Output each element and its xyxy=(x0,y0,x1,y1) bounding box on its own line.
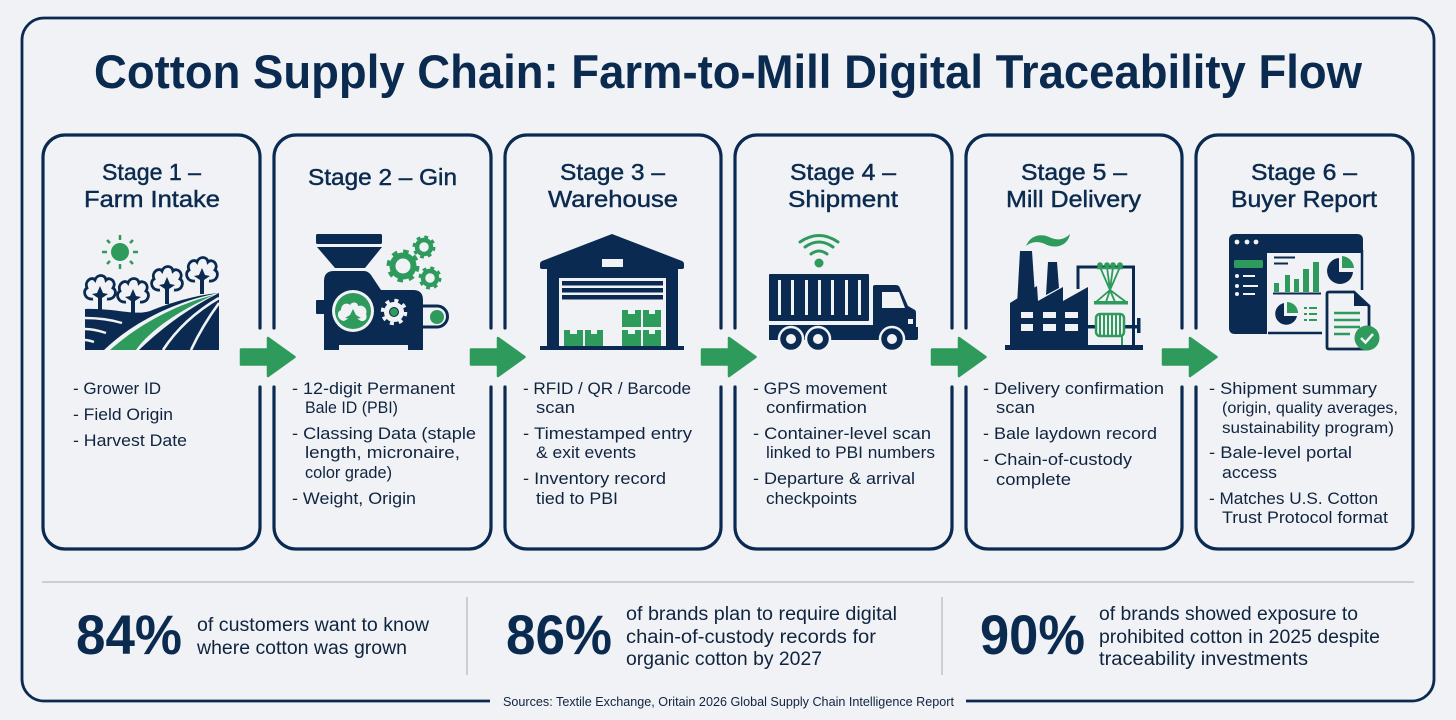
stat: 86% xyxy=(506,603,897,670)
heading: stage 3 xyxy=(548,159,678,212)
stat: 84%: of customers want to know xyxy=(197,615,429,636)
list: stage 3 details: scan xyxy=(536,398,575,417)
panel: stage 2 gin xyxy=(274,135,491,549)
list: stage 6 details: (origin, quality averages, xyxy=(1222,400,1398,417)
list: stage 4 details: linked to PBI numbers xyxy=(766,443,935,462)
list: stage 5 details: - Chain-of-custody xyxy=(983,450,1133,469)
arrow: stage 3 to 4 xyxy=(702,338,756,376)
stat: 86%: 86% xyxy=(506,603,612,666)
heading: stage 5 xyxy=(1006,159,1142,212)
stat: 84%: where cotton was grown xyxy=(196,638,407,659)
list: stage 5 details: complete xyxy=(996,470,1071,489)
list: stage 6 details: access xyxy=(1222,463,1277,482)
heading: stage 5: Mill Delivery xyxy=(1006,186,1142,212)
list: stage 3 details: - Timestamped entry xyxy=(523,424,693,443)
list: stage 6 details: - Matches U.S. Cotton xyxy=(1209,489,1378,508)
list: stage 1 details: - Grower ID xyxy=(73,379,161,398)
list: stage 3 details: - Inventory record xyxy=(523,469,666,488)
panel: stage 4 shipment xyxy=(735,135,952,549)
icon: warehouse xyxy=(540,234,684,350)
list: stage 5 details: - Bale laydown record xyxy=(983,424,1157,443)
list: stage 6 details xyxy=(1209,379,1398,527)
list: stage 1 details xyxy=(73,379,187,450)
list: stage 1 details: - Field Origin xyxy=(73,405,173,424)
heading: stage 3: Warehouse xyxy=(548,186,678,212)
list: stage 6 details: - Shipment summary xyxy=(1209,379,1378,398)
stat: 90%: prohibited cotton in 2025 despite xyxy=(1099,627,1380,648)
icon: cotton farm xyxy=(85,235,219,350)
stat: 90%: traceability investments xyxy=(1099,649,1308,670)
heading: stage 4 xyxy=(788,159,899,212)
heading: stage 4: Shipment xyxy=(788,186,899,212)
list: stage 4 details: confirmation xyxy=(766,398,867,417)
icon: cotton gin machine xyxy=(316,234,448,350)
list: stage 4 details: - Departure & arrival xyxy=(753,469,915,488)
arrow: stage 4 to 5 xyxy=(932,338,986,376)
list: stage 3 details xyxy=(523,379,693,508)
list: stage 5 details: scan xyxy=(996,398,1035,417)
heading: stage 3: Stage 3 – xyxy=(560,159,665,185)
list: stage 5 details: - Delivery confirmation xyxy=(983,379,1164,398)
panel: stage 6 buyer report xyxy=(1196,135,1413,549)
stat: 90%: 90% xyxy=(980,603,1085,666)
list: stage 3 details: - RFID / QR / Barcode xyxy=(523,379,691,398)
stat: 86%: organic cotton by 2027 xyxy=(626,649,822,670)
sources note: Sources: Textile Exchange, Oritain 2026 Global Supply Chain Intelligence Report xyxy=(503,695,955,709)
stat: 86%: of brands plan to require digital xyxy=(626,604,897,625)
list: stage 2 details: color grade) xyxy=(305,463,392,482)
arrow: stage 5 to 6 xyxy=(1163,338,1216,376)
panel: stage 5 mill delivery xyxy=(966,135,1182,549)
panel: stage 3 warehouse xyxy=(505,135,721,549)
list: stage 6 details: - Bale-level portal xyxy=(1209,443,1352,462)
icon: container truck with wifi xyxy=(769,236,918,351)
arrow: stage 2 to 3 xyxy=(471,338,524,376)
list: stage 6 details: Trust Protocol format xyxy=(1222,508,1388,527)
heading: stage 6 xyxy=(1231,159,1378,212)
heading: stage 2: Stage 2 – Gin xyxy=(308,164,457,190)
list: stage 6 details: sustainability program) xyxy=(1222,420,1394,437)
arrow: stage 1 to 2 xyxy=(241,338,294,376)
heading: stage 6: Buyer Report xyxy=(1231,186,1378,212)
icon: report dashboard xyxy=(1229,234,1380,350)
heading: stage 4: Stage 4 – xyxy=(790,159,896,185)
list: stage 3 details: tied to PBI xyxy=(536,489,618,508)
heading: stage 1: Stage 1 – xyxy=(102,159,201,185)
stat: 84%: 84% xyxy=(76,603,182,666)
title: Cotton Supply Chain: Farm-to-Mill Digital Traceability Flow xyxy=(94,45,1362,98)
stat: 90% xyxy=(980,603,1380,670)
list: stage 3 details: & exit events xyxy=(536,443,636,462)
icon: textile mill factory xyxy=(1005,234,1143,350)
heading: stage 5: Stage 5 – xyxy=(1021,159,1127,185)
stat: 90%: of brands showed exposure to xyxy=(1099,604,1358,625)
list: stage 4 details xyxy=(753,379,935,508)
list: stage 2 details: length, micronaire, xyxy=(305,443,460,462)
list: stage 2 details: - Weight, Origin xyxy=(292,489,416,508)
list: stage 5 details xyxy=(983,379,1164,489)
heading: stage 6: Stage 6 – xyxy=(1251,159,1357,185)
stat: 84% xyxy=(76,603,429,666)
list: stage 2 details: - Classing Data (staple xyxy=(292,424,476,443)
panel: stage 1 farm intake xyxy=(43,135,260,549)
list: stage 4 details: - Container-level scan xyxy=(753,424,931,443)
stat: 86%: chain-of-custody records for xyxy=(626,627,877,648)
heading: stage 1 xyxy=(84,159,220,212)
list: stage 4 details: - GPS movement xyxy=(753,379,887,398)
list: stage 2 details: - 12-digit Permanent xyxy=(292,379,455,398)
list: stage 1 details: - Harvest Date xyxy=(73,431,187,450)
list: stage 4 details: checkpoints xyxy=(766,489,857,508)
heading: stage 1: Farm Intake xyxy=(84,186,220,212)
list: stage 2 details xyxy=(292,379,476,508)
list: stage 2 details: Bale ID (PBI) xyxy=(305,398,398,417)
